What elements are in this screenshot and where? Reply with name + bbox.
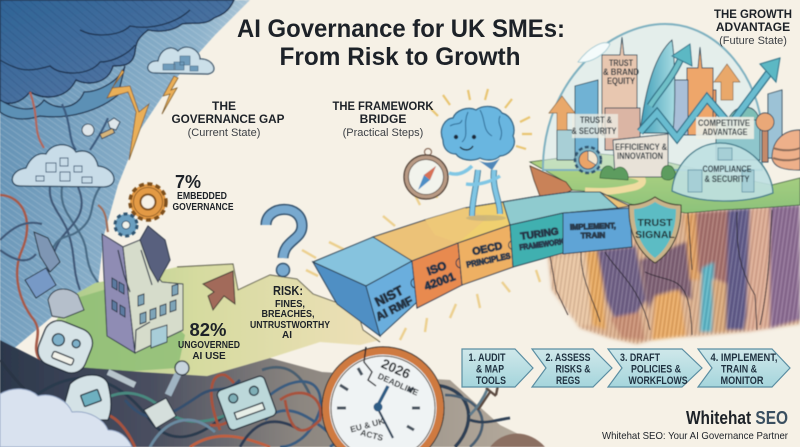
- heading: the framework bridge: [332, 99, 434, 139]
- callout: risk: AI: [282, 330, 292, 341]
- step 1: audit and map tools: & MAP: [476, 364, 504, 376]
- Implement block: [563, 208, 632, 254]
- step 3: draft policies and workflows: [608, 349, 702, 387]
- wire and robot pile: [0, 340, 545, 447]
- icon: brain mascot: [441, 106, 514, 221]
- label board: trust and security: [572, 114, 618, 138]
- small dome: [672, 143, 773, 201]
- stat: 7% embedded governance: EMBEDDED: [177, 191, 227, 202]
- callout: risk: FINES,: [275, 299, 305, 310]
- stat: 82% ungoverned AI use: AI USE: [192, 351, 226, 362]
- city label: compliance and security: [702, 164, 752, 184]
- title: [237, 15, 565, 71]
- icon: cloud with servers, lower: [12, 145, 114, 187]
- panel: governance gap storm scene: [0, 0, 250, 360]
- panel: growth advantage dome city: [543, 24, 800, 201]
- icon: trust shield: SIGNAL: [635, 229, 675, 241]
- step 3: draft policies and workflows: 3. DRAFT: [620, 352, 660, 364]
- stat: 7% embedded governance: 7%: [175, 172, 201, 192]
- step 4: implement, train and monitor: TRAIN &: [721, 364, 757, 376]
- brand: tagline: Whitehat SEO: Your AI Governance Partner: [602, 430, 788, 442]
- icon: orange arrows: [549, 64, 740, 130]
- winding path: [585, 174, 642, 192]
- clock acts line two: ACTS: [359, 427, 385, 443]
- city label: compliance and security: & SECURITY: [704, 174, 750, 184]
- brain glow rays: [430, 89, 532, 149]
- icon: robot, right: [216, 375, 277, 431]
- OECD block: [458, 225, 518, 285]
- ISO block: [412, 243, 466, 308]
- right tower and sphere: [756, 113, 800, 170]
- icon: compass: [404, 148, 448, 199]
- icon: orange gear: [130, 184, 166, 220]
- callout: risk: RISK:: [273, 283, 303, 298]
- Implement block: IMPLEMENT,: [570, 221, 616, 232]
- stat: 7% embedded governance: [172, 172, 234, 213]
- title: From Risk to Growth: [280, 43, 520, 71]
- step 1: audit and map tools: 1. AUDIT: [468, 352, 506, 364]
- green slope: [62, 285, 185, 372]
- NIST block: NIST: [372, 283, 406, 309]
- step 1: audit and map tools: [462, 349, 533, 387]
- icon: lightning bolts: [107, 70, 178, 160]
- storm wires: [0, 92, 108, 360]
- city label: trust and brand equity: [603, 58, 639, 86]
- Turing block: [510, 213, 565, 267]
- heading: the framework bridge: BRIDGE: [360, 112, 406, 126]
- label building: [613, 134, 668, 177]
- big dome glass: [543, 24, 762, 170]
- clock year text: 2026: [379, 356, 413, 382]
- bridge top surface: [373, 192, 630, 261]
- heading: the growth advantage: ADVANTAGE: [716, 20, 790, 34]
- buildings: [557, 37, 782, 160]
- icon: deadline clock: [322, 347, 444, 447]
- bushes: [600, 166, 675, 180]
- rain wedge: [0, 0, 250, 360]
- city label: trust and security: TRUST &: [580, 115, 612, 125]
- icon: plug: [478, 385, 498, 410]
- step 4: implement, train and monitor: [698, 349, 790, 387]
- step 4: implement, train and monitor: 4. IMPLEMENT,: [710, 352, 778, 364]
- panel: cliff rock: [548, 205, 800, 344]
- icon: ground crack: [203, 271, 235, 310]
- stat: 82% ungoverned AI use: UNGOVERNED: [178, 340, 240, 351]
- stat: 7% embedded governance: GOVERNANCE: [172, 202, 234, 213]
- city label: competitive advantage: ADVANTAGE: [702, 127, 748, 137]
- heading: the growth advantage: THE GROWTH: [714, 7, 792, 21]
- heading: the framework bridge: (Practical Steps): [343, 127, 423, 139]
- clock deadline text: DEADLINE: [376, 371, 420, 398]
- panel: framework bridge: [313, 192, 632, 336]
- title: AI Governance for UK SMEs:: [237, 15, 565, 43]
- heading: the growth advantage: [714, 7, 792, 47]
- storm clouds: [0, 0, 234, 119]
- icon: cloud with servers, upper: [148, 47, 214, 74]
- stat: 82% ungoverned AI use: 82%: [190, 320, 226, 340]
- heading: the governance gap: GOVERNANCE GAP: [172, 112, 284, 126]
- callout: risk: [250, 283, 330, 341]
- small left rocks: [530, 166, 572, 200]
- callout: risk: BREACHES,: [262, 309, 315, 320]
- city label: trust and brand equity: EQUITY: [607, 76, 635, 86]
- step 4: implement, train and monitor: MONITOR: [720, 375, 764, 387]
- city label: competitive advantage: [698, 118, 750, 137]
- step 2: assess risks and regs: REGS: [556, 375, 580, 387]
- city label: trust and brand equity: & BRAND: [603, 67, 639, 77]
- city label: efficiency and innovation: [615, 142, 667, 161]
- clock acts text: EU & UK: [349, 416, 386, 434]
- step 3: draft policies and workflows: POLICIES &: [631, 364, 681, 376]
- icon: question mark: [266, 209, 302, 276]
- city label: trust and security: & SECURITY: [572, 126, 616, 136]
- city label: efficiency and innovation: INNOVATION: [617, 151, 663, 161]
- step 2: assess risks and regs: RISKS &: [556, 364, 591, 376]
- dome highlight: [578, 43, 610, 62]
- heading: the framework bridge: THE FRAMEWORK: [332, 99, 434, 113]
- city label: compliance and security: COMPLIANCE: [702, 164, 752, 174]
- heading: the governance gap: THE: [212, 99, 236, 113]
- ISO block: ISO: [426, 260, 448, 278]
- step 3: draft policies and workflows: WORKFLOWS: [628, 375, 688, 387]
- hill edge: [177, 264, 380, 342]
- rays under bridge: [302, 184, 540, 340]
- step 2: assess risks and regs: [532, 349, 612, 387]
- heading: the governance gap: (Current State): [188, 127, 260, 139]
- icon: robot, left: [33, 316, 189, 420]
- OECD block: OECD: [471, 240, 504, 258]
- icon: growth arrows: [640, 44, 780, 138]
- panel: plateau: [530, 154, 800, 213]
- city label: efficiency and innovation: EFFICIENCY &: [615, 142, 667, 152]
- Implement block: TRAIN: [581, 231, 605, 240]
- OECD block: PRINCIPLES: [465, 250, 512, 270]
- ISO block: 42001: [423, 271, 458, 293]
- icon: pie gear: [575, 147, 601, 173]
- heading: the growth advantage: (Future State): [719, 35, 787, 47]
- Turing block: TURING: [520, 226, 560, 243]
- robot debris: [25, 232, 176, 428]
- icon: blue gear: [115, 214, 137, 236]
- label board: competitive: [696, 117, 754, 139]
- stat: 82% ungoverned AI use: [178, 320, 240, 362]
- city label: trust and security: [572, 115, 616, 136]
- icon: gutted robot arm: [82, 118, 120, 139]
- callout: risk: UNTRUSTWORTHY: [250, 320, 330, 331]
- icon: trust shield: [629, 197, 681, 263]
- icon: trust shield: TRUST: [638, 217, 673, 229]
- step 2: assess risks and regs: 2. ASSESS: [546, 352, 590, 364]
- NIST block: AI RMF: [374, 295, 415, 324]
- step 1: audit and map tools: TOOLS: [476, 375, 506, 387]
- cloud, bottom left: [0, 389, 132, 447]
- NIST block: [313, 237, 421, 336]
- city label: competitive advantage: COMPETITIVE: [698, 118, 750, 128]
- city label: trust and brand equity: TRUST: [609, 58, 633, 68]
- brand: whitehat seo logo: Whitehat SEO: [686, 408, 788, 428]
- Turing block: FRAMEWORK: [519, 237, 565, 252]
- heading: the governance gap: [172, 99, 284, 139]
- ground hill: [50, 264, 380, 376]
- panel: crumbling building: [102, 226, 183, 353]
